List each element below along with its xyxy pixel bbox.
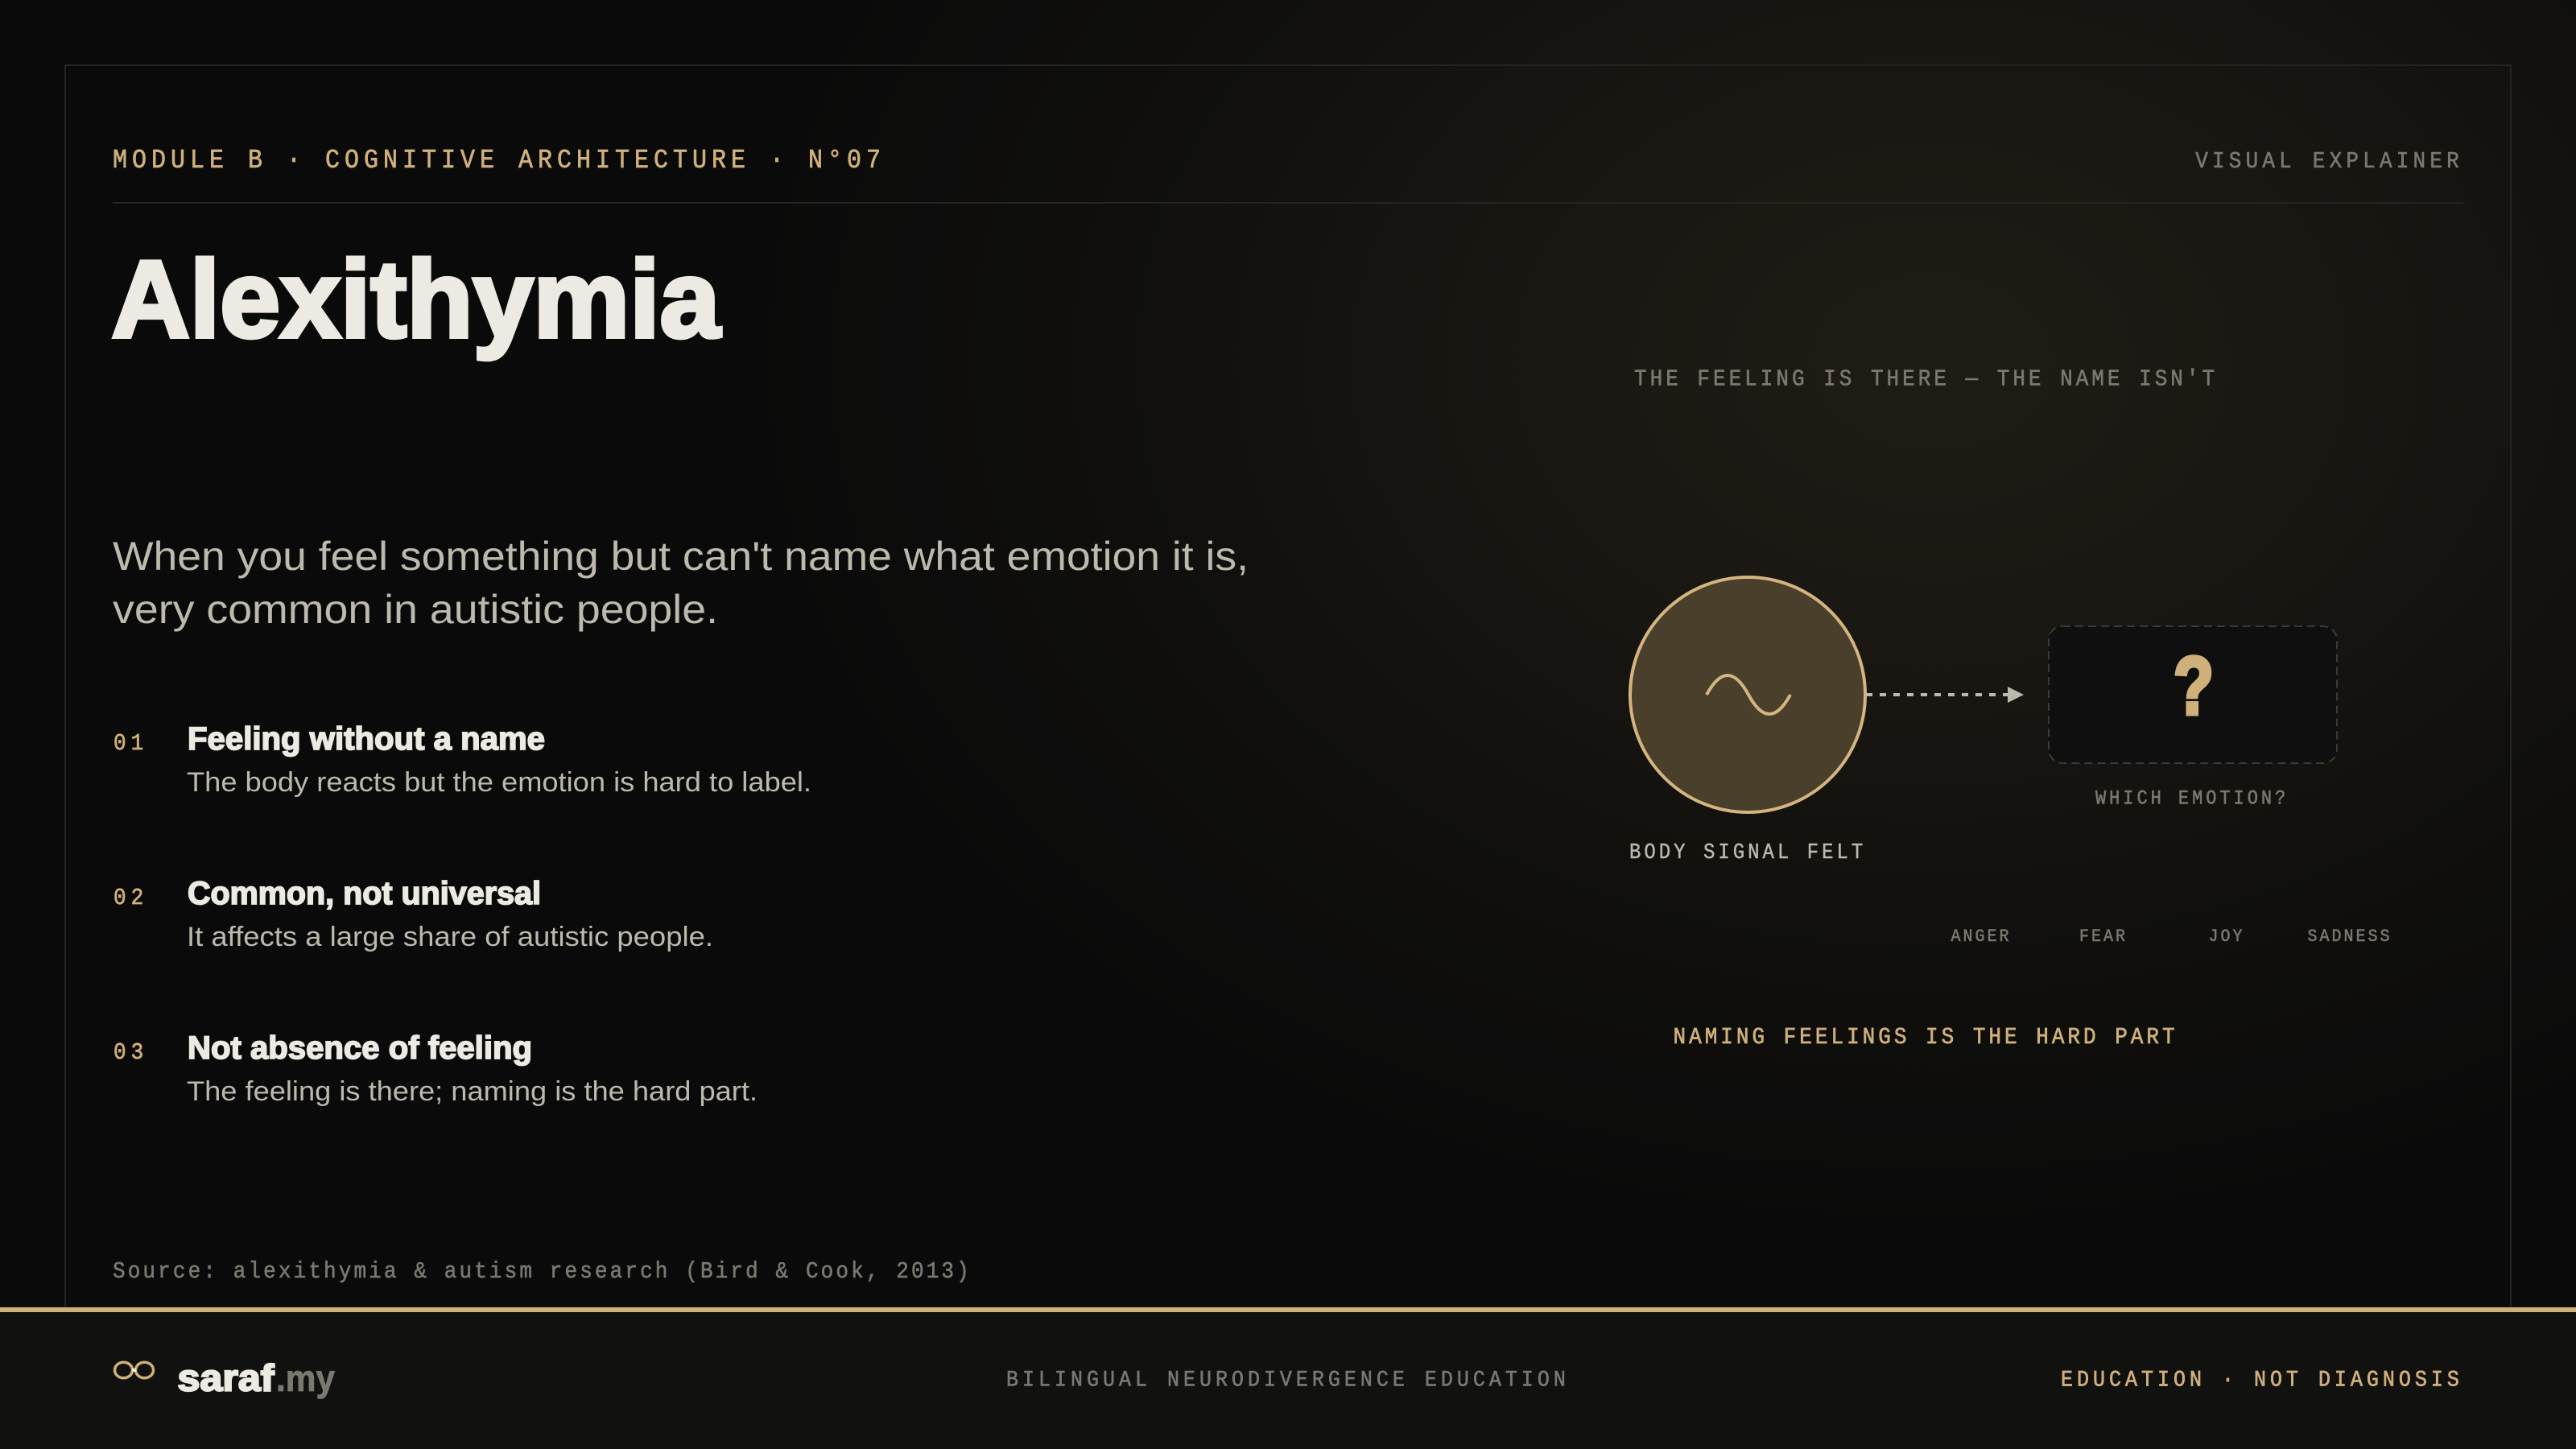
footer right text: EDUCATION · NOT DIAGNOSIS [2061,1367,2463,1393]
point 03: The feeling is there; naming is the hard part. [187,1076,758,1107]
point 03: 03 [114,1040,148,1066]
emotion labels: FEAR [2079,927,2128,947]
panel: key points list [114,721,811,1107]
icon: body signal circle [1630,577,1865,812]
icon: question mark: ? [2174,640,2214,732]
arrow [1866,687,2024,703]
source note: Source: alexithymia & autism research (Bird & Cook, 2013) [113,1259,972,1285]
label: body signal felt: BODY SIGNAL FELT [1629,840,1866,865]
point 02: Common, not universal [188,876,541,911]
point 01: Feeling without a name [188,721,545,757]
eyebrow: module label: MODULE B · COGNITIVE ARCHITECTURE · N°07 [113,145,886,176]
footer bar [0,1307,2576,1449]
point 03 [114,1030,758,1107]
logo wordmark: saraf [177,1357,275,1399]
point 01: The body reacts but the emotion is hard to label. [187,767,811,798]
emotion labels: ANGER [1951,927,2011,947]
point 02 [114,876,713,952]
subtitle text block: When you feel something but can't name what emotion it is, [113,534,1249,579]
subtitle text block [113,534,1249,632]
unknown emotion box [2049,626,2337,763]
panel: diagram [1629,366,2392,1051]
subtitle text block: very common in autistic people. [113,587,718,632]
diagram heading: THE FEELING IS THERE — THE NAME ISN'T [1634,366,2218,393]
emotion labels [1951,927,2392,947]
footer center text: BILINGUAL NEURODIVERGENCE EDUCATION [1006,1367,1570,1393]
emotion labels: JOY [2209,927,2244,947]
label: which emotion: WHICH EMOTION? [2095,789,2289,811]
icon: infinity logo [114,1362,153,1378]
point 03: Not absence of feeling [188,1030,532,1066]
point 01 [114,721,811,798]
logo wordmark [177,1357,335,1399]
point 01: 01 [114,731,148,757]
point 02: 02 [114,886,148,911]
diagram caption: NAMING FEELINGS IS THE HARD PART [1673,1025,2178,1051]
tag: visual explainer: VISUAL EXPLAINER [2195,149,2463,175]
title: Alexithymia [111,238,721,361]
point 02: It affects a large share of autistic people. [187,922,713,952]
emotion labels: SADNESS [2307,927,2392,947]
logo wordmark: .my [276,1357,335,1399]
